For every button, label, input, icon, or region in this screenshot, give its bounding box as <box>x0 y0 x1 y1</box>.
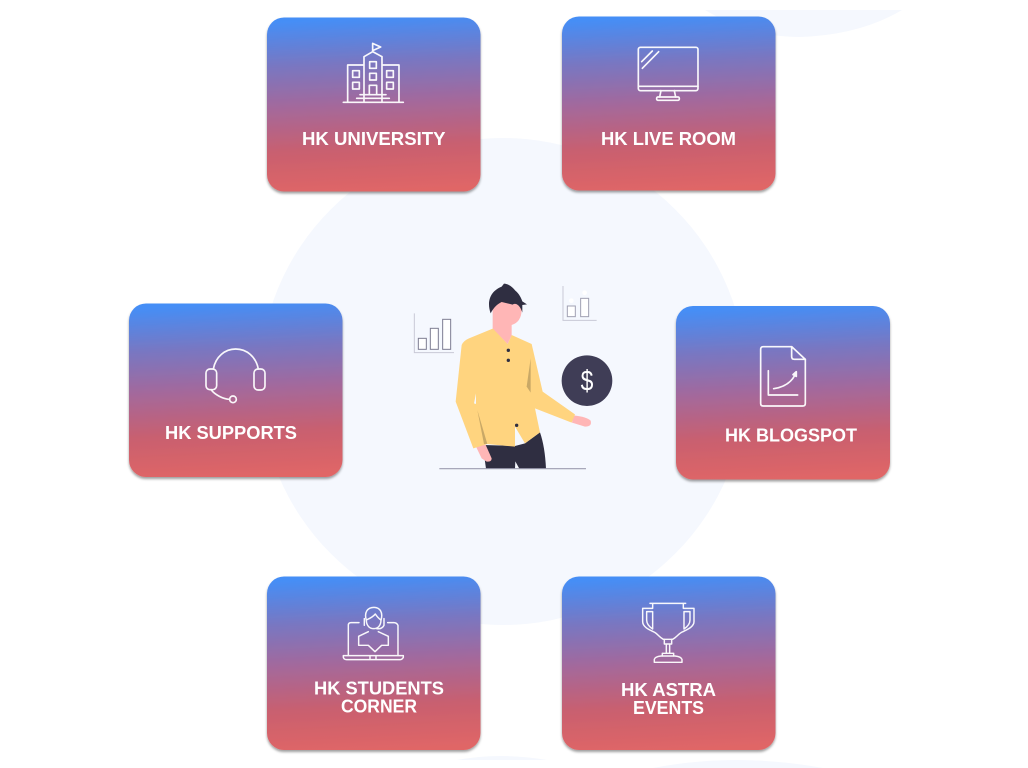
label: first line: HK ASTRA <box>621 680 716 700</box>
background blob: top right <box>705 10 902 37</box>
icon: university building <box>343 43 403 102</box>
background blob: bottom centre <box>457 756 547 760</box>
label: HK SUPPORTS <box>165 423 297 443</box>
panel: HK Blogspot <box>676 306 890 480</box>
label: HK UNIVERSITY <box>302 129 446 149</box>
card background <box>267 18 480 192</box>
card background <box>267 576 480 750</box>
panel: HK Live Room <box>562 16 776 190</box>
panel: HK Supports <box>129 304 342 477</box>
label: HK LIVE ROOM <box>601 129 736 149</box>
card background <box>562 576 776 750</box>
icon: headset <box>206 349 265 403</box>
icon: dollar coin: $ <box>581 366 593 397</box>
background circle <box>260 138 746 625</box>
central illustration: person with charts and coin <box>414 284 612 469</box>
card background <box>129 304 342 477</box>
ground line <box>439 467 586 470</box>
card background <box>562 16 776 190</box>
icon: monitor <box>638 47 698 100</box>
label: second line: EVENTS <box>633 698 704 718</box>
panel: HK Astra Events <box>562 576 776 750</box>
card background <box>676 306 890 480</box>
icon: student on laptop <box>343 607 403 660</box>
label: first line: HK STUDENTS <box>314 678 444 698</box>
background blob: bottom right <box>653 760 823 768</box>
icon: right bar chart <box>563 286 597 320</box>
label: second line: CORNER <box>341 696 417 716</box>
icon: trophy <box>643 603 694 662</box>
panel: HK University <box>267 18 480 192</box>
person <box>456 284 591 469</box>
icon: document with growth chart <box>761 347 805 406</box>
label: HK BLOGSPOT <box>725 426 857 446</box>
panel: HK Students Corner <box>267 576 480 750</box>
icon: left bar chart <box>414 313 454 353</box>
icon: dollar coin <box>562 355 612 406</box>
